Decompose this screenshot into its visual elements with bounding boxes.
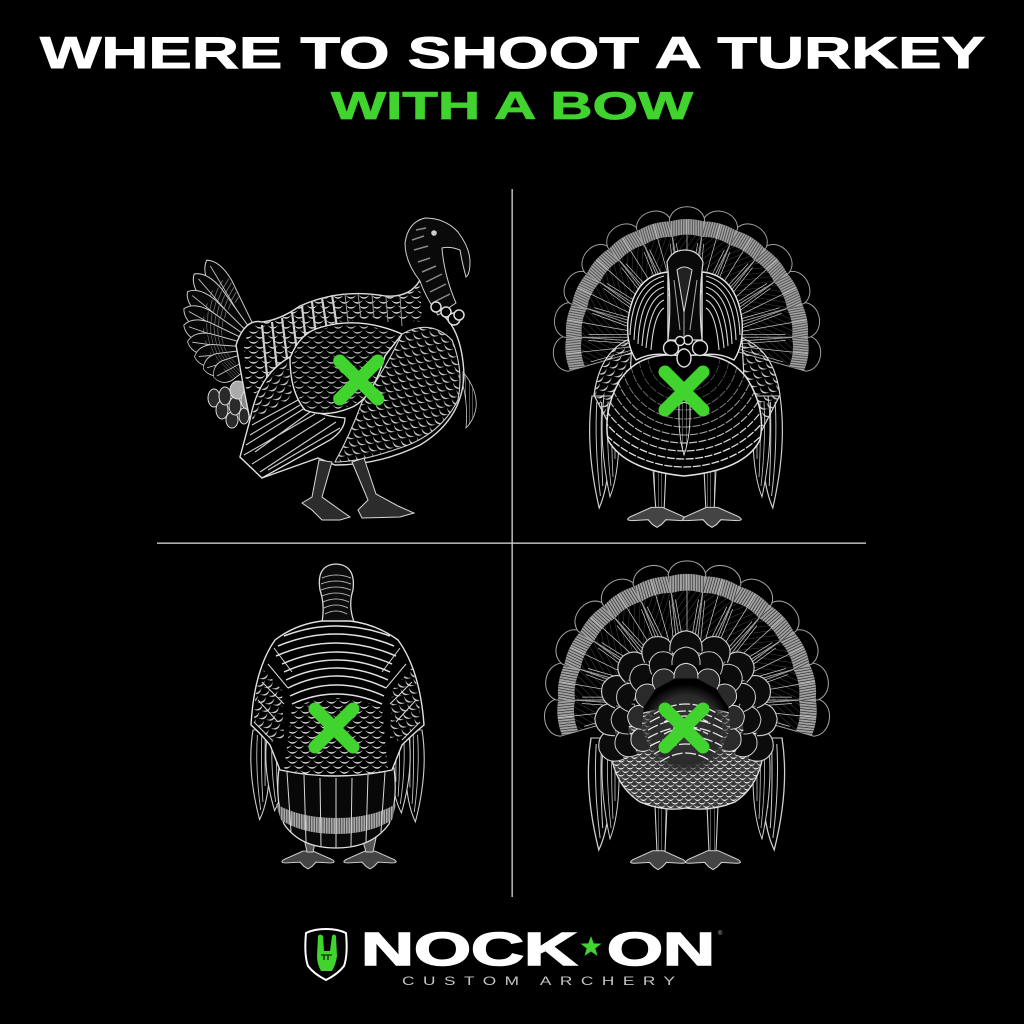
turkey strut: covert rings [594, 631, 778, 766]
icon: green star [580, 936, 602, 956]
panel: rear view turkey [251, 564, 424, 869]
turkey strut: right wing [753, 738, 785, 850]
turkey side: tail fan [179, 254, 271, 387]
turkey front: legs [653, 468, 716, 512]
turkey side: primaries [240, 357, 345, 478]
turkey side: wing [290, 323, 402, 414]
turkey side: left leg [302, 460, 350, 520]
turkey side: eye [431, 230, 437, 236]
wordmark: ON: ON [607, 923, 715, 975]
turkey rear: neck [319, 564, 354, 622]
turkey side: neck texture [412, 228, 450, 302]
turkey side: back feathers [244, 282, 422, 395]
turkey strut: feet [631, 851, 740, 870]
turkey side: wing scales [292, 325, 400, 412]
quadrant divider: vertical [512, 189, 513, 897]
turkey strut: left wing [588, 738, 619, 850]
turkey side: right leg [352, 458, 414, 518]
tagline: CUSTOM ARCHERY [402, 976, 675, 988]
turkey strut: tail fan [543, 561, 831, 738]
turkey side: body [236, 280, 464, 478]
turkey front: feet [628, 507, 741, 527]
title [40, 29, 985, 128]
turkey rear: legs [304, 838, 376, 852]
turkey front: tail fan [552, 207, 822, 373]
green x: front view [665, 372, 703, 410]
title: WHERE TO SHOOT A TURKEY [40, 29, 985, 78]
green x: strutting view [665, 709, 703, 747]
turkey front: neck and head [667, 250, 703, 340]
turkey side: beard [463, 372, 476, 428]
turkey rear: neck rings [321, 575, 351, 614]
panel: side view turkey [179, 218, 476, 520]
turkey front: right wing [742, 338, 782, 508]
green x: side view [340, 361, 378, 399]
wordmark: NOCK: NOCK [361, 923, 577, 975]
icon: shield with rock hand [305, 929, 347, 980]
turkey rear: feet [282, 851, 396, 869]
turkey rear: body and back [251, 621, 424, 776]
panel: front view turkey [552, 207, 822, 527]
logo: Nock On Custom Archery [305, 923, 723, 988]
registered mark: ® [718, 930, 723, 937]
turkey front: beard [679, 402, 690, 455]
turkey rear: tail [276, 768, 396, 848]
panel: strutting rear view turkey [543, 561, 831, 870]
turkey side: chest [335, 327, 460, 462]
turkey rear: right wing feathers [391, 730, 424, 822]
turkey strut: lower body [610, 708, 764, 809]
turkey front: breast [606, 354, 762, 477]
turkey front: wattles [664, 336, 708, 367]
turkey rear: left wing feathers [251, 730, 285, 820]
title: WITH A BOW [331, 85, 693, 128]
turkey side: neck and head [405, 218, 470, 315]
green x: rear view [315, 709, 353, 747]
turkey front: left wing [590, 338, 632, 508]
quadrant divider: horizontal [157, 542, 866, 544]
turkey front: shoulders [628, 272, 742, 360]
turkey side: tail coverts [208, 381, 253, 428]
turkey strut: central crescents [640, 684, 732, 776]
turkey side: wattles [431, 302, 464, 325]
turkey strut: legs [655, 805, 718, 852]
